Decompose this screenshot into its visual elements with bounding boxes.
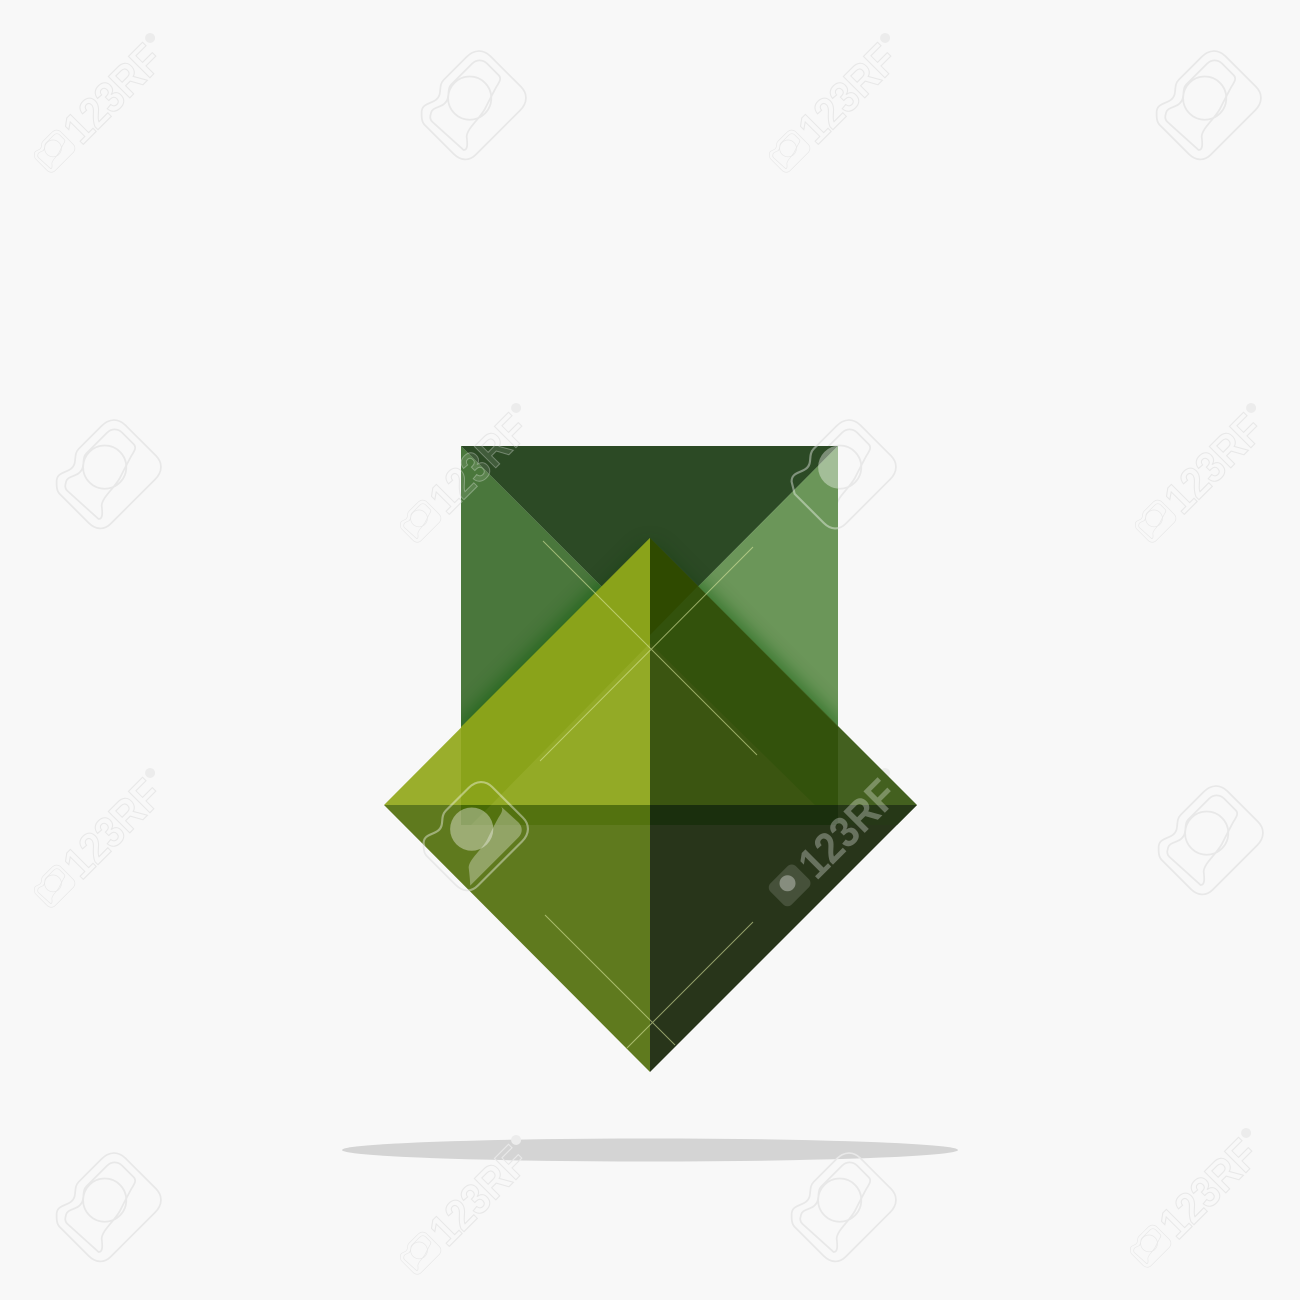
watermark logo 2 (760, 27, 915, 183)
left overlap band (461, 805, 650, 825)
watermark logo 7 (391, 1129, 546, 1285)
watermark logo 4: 123RF (1155, 405, 1273, 523)
watermark logo 7: 123RF (420, 1137, 538, 1255)
watermark logo 1 (25, 27, 180, 183)
shadow on left triangle (461, 578, 602, 727)
watermark logo 2: 123RF (789, 35, 907, 153)
watermark logo 4 (1126, 397, 1281, 553)
watermark camera icon 4 over square (790, 446, 838, 530)
watermark logo 8 (1121, 1122, 1276, 1278)
watermark camera icon 8 (782, 1147, 902, 1267)
watermark logo 6: 123RF (789, 770, 907, 888)
watermark camera icon 2 (1147, 45, 1267, 165)
watermark logo 5: 123RF (54, 770, 172, 888)
watermark camera icon 6 (1149, 780, 1269, 900)
watermark logo 6 over diamond: 123RF (789, 770, 907, 888)
square top triangle (461, 446, 838, 635)
shadow on top triangle (699, 584, 700, 586)
diamond front layer (384, 538, 917, 1072)
lower right facet (650, 805, 917, 1072)
right band outer part (838, 805, 917, 825)
lower left facet (384, 805, 650, 1072)
thin diagonal highlight lines (540, 541, 757, 1048)
watermark logo 6 over diamond (768, 777, 891, 906)
upper right inner triangle (650, 643, 815, 805)
right overlap band (650, 805, 838, 825)
watermark camera icon 3 (47, 414, 167, 534)
upper left facet (384, 538, 650, 805)
watermark logo 6 (760, 762, 915, 918)
upper right facet over square (650, 538, 838, 805)
watermark camera icon 5 (414, 776, 534, 896)
watermark camera icon 1 (412, 45, 532, 165)
watermark camera icon 7 (47, 1147, 167, 1267)
left overlap band corner (461, 805, 491, 825)
upper left facet over square (461, 538, 650, 805)
upper right apex overlap (650, 538, 698, 635)
watermark logo 8: 123RF (1150, 1130, 1268, 1248)
watermark logo 1: 123RF (54, 35, 172, 153)
square back layer (461, 446, 838, 727)
watermark logo 5 (25, 762, 180, 918)
square right triangle (650, 446, 838, 825)
ground shadow (342, 1138, 958, 1162)
upper left lighter inner triangle (491, 643, 650, 805)
watermark logo 3 over square: 123RF (420, 405, 538, 523)
watermark camera icon 5 over diamond (422, 781, 529, 892)
shadow on right triangle (698, 577, 838, 726)
upper right facet (650, 538, 917, 805)
square left triangle (461, 446, 650, 825)
watermark logo 3: 123RF (420, 405, 538, 523)
watermark camera icon 4 (782, 414, 902, 534)
watermark logo 3 (391, 397, 546, 553)
